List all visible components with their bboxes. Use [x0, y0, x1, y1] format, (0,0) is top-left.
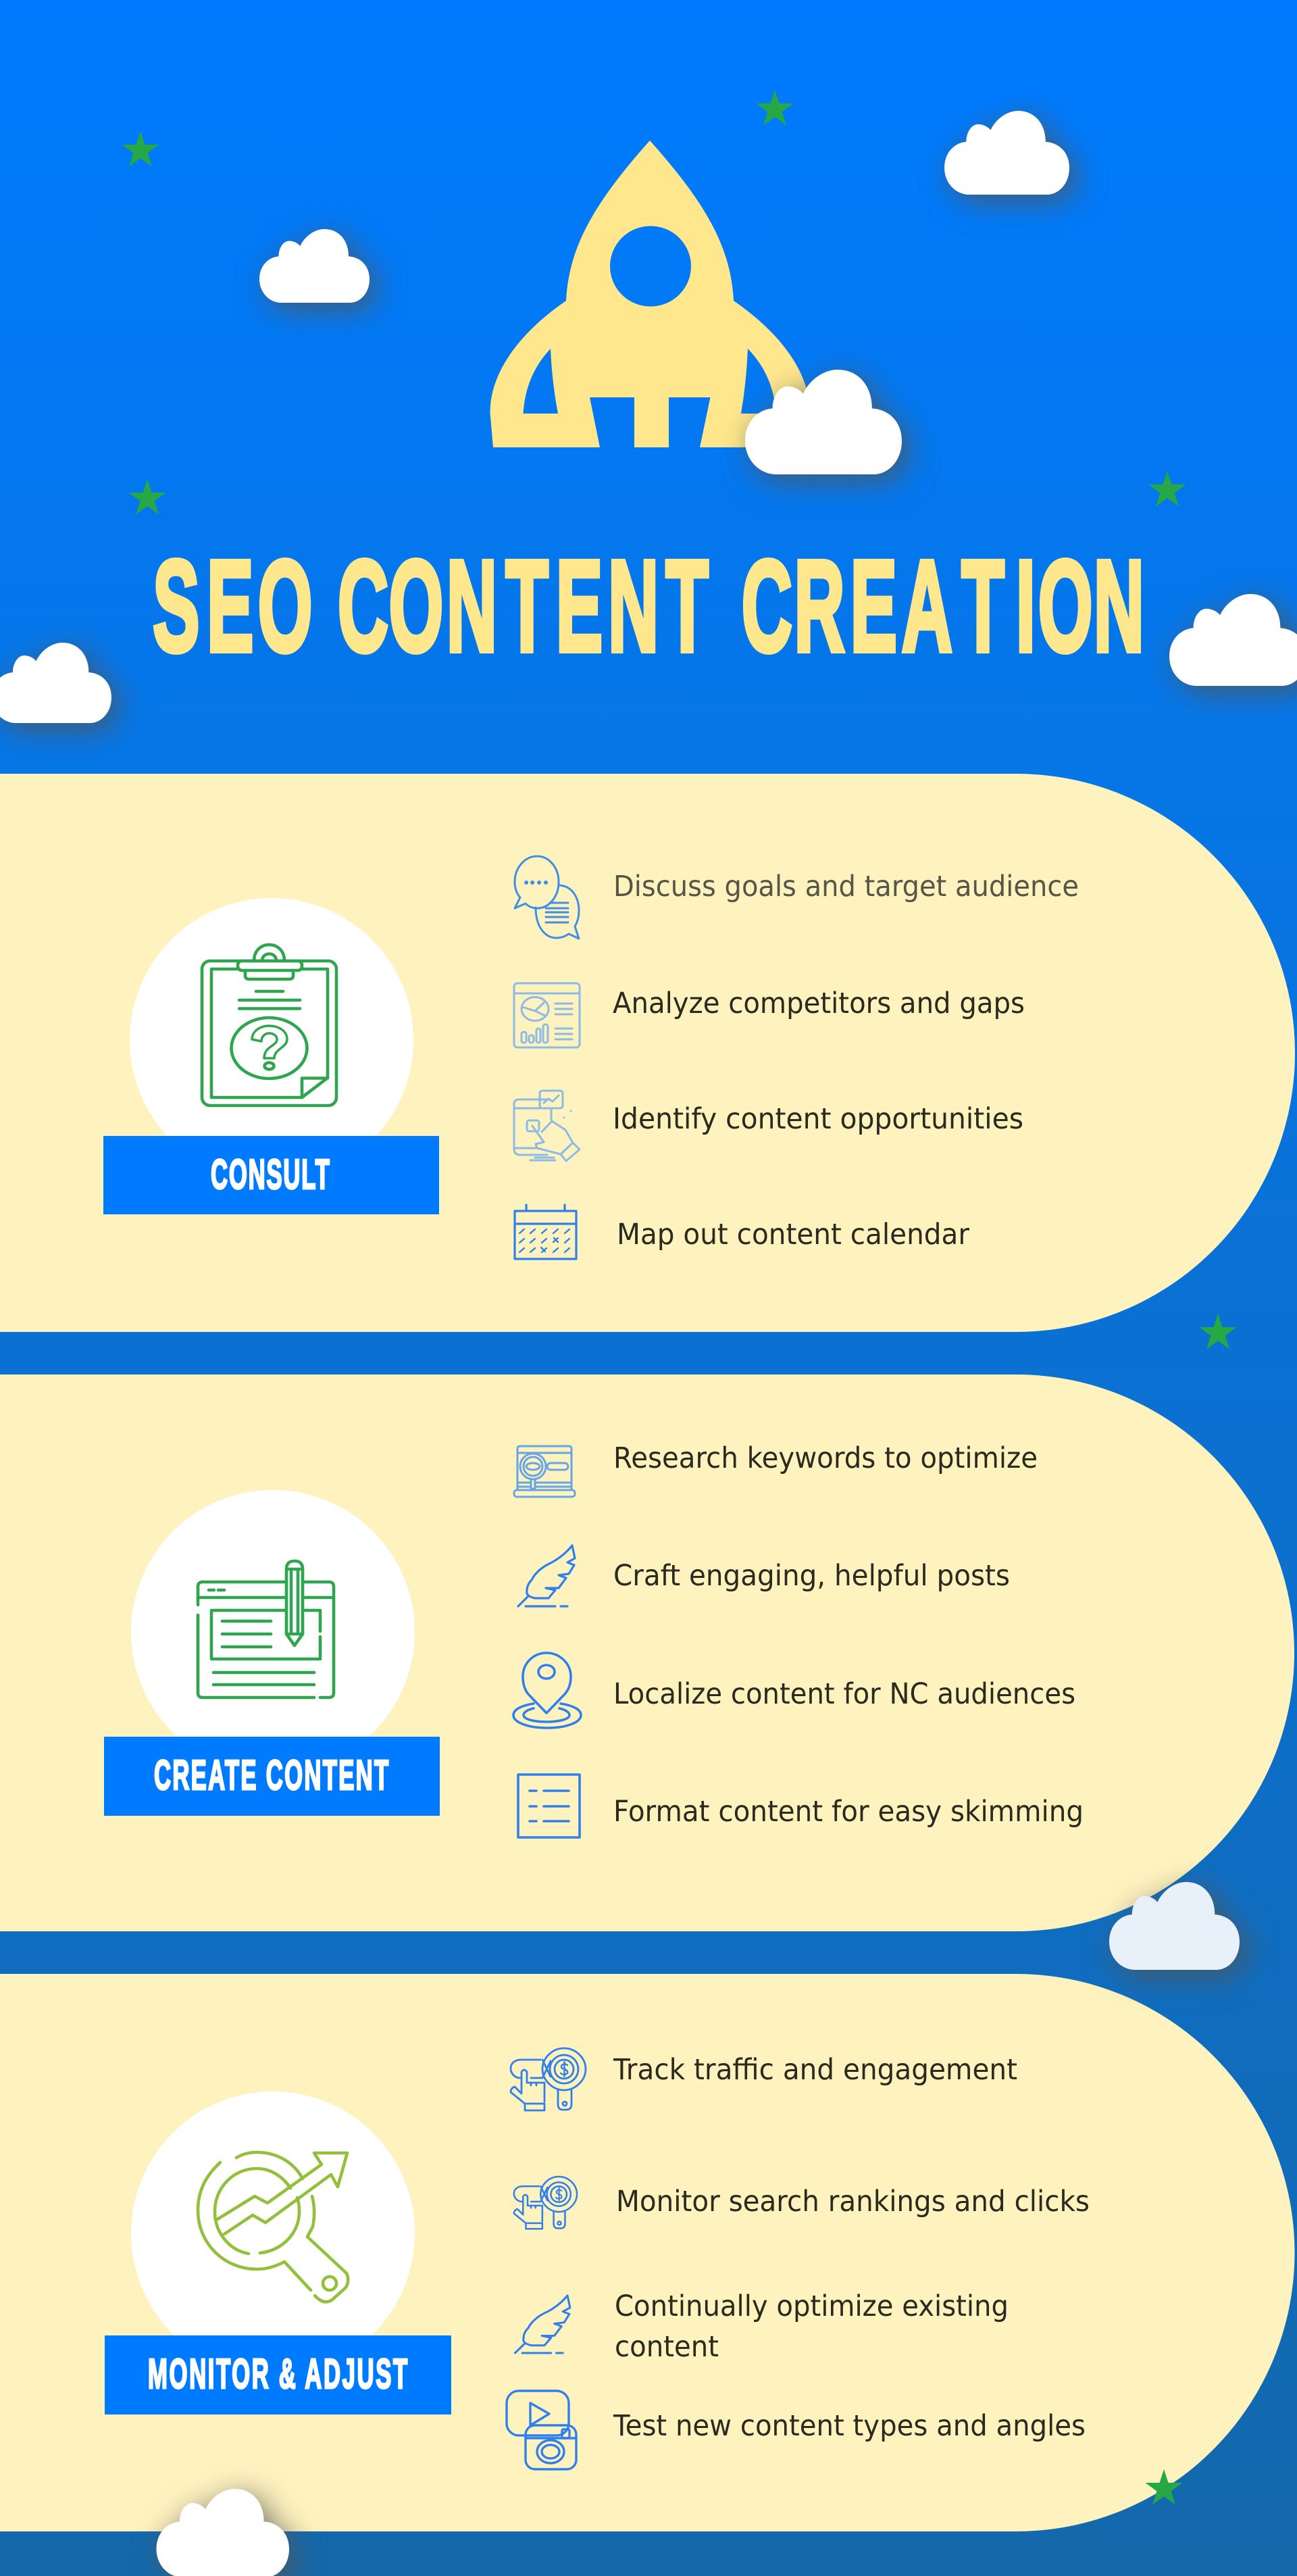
icon: dashboard	[514, 983, 580, 1047]
icon: calendar	[515, 1205, 576, 1259]
consult icon circle	[130, 898, 413, 1182]
icon: hand and dollar lens small	[514, 2177, 577, 2229]
icon: phone and hand	[514, 1091, 580, 1161]
panel: create content	[0, 1374, 1294, 1931]
icon: list document	[518, 1775, 580, 1837]
create content list text: Localize content for NC audiences	[613, 1677, 1075, 1711]
consult list text: Identify content opportunities	[613, 1102, 1023, 1136]
icon: laptop with magnifier	[514, 1446, 575, 1497]
monitor list text: Track traffic and engagement	[613, 2053, 1017, 2087]
star top left	[122, 131, 159, 166]
monitor list text: Test new content types and angles	[613, 2409, 1086, 2443]
create content label	[104, 1737, 440, 1816]
cloud top left	[259, 229, 370, 303]
cloud bottom	[157, 2489, 289, 2576]
icon: window with pencil	[198, 1561, 334, 1698]
consult label	[103, 1136, 439, 1214]
rocket	[490, 141, 810, 447]
icon: feather small	[515, 2296, 570, 2353]
icon: hand and dollar lens	[511, 2048, 586, 2110]
panel: consult	[0, 774, 1295, 1332]
icon: clipboard with question mark	[202, 945, 336, 1106]
icon: feather	[518, 1545, 575, 1606]
cloud over rocket	[745, 370, 902, 474]
monitor label	[105, 2335, 451, 2414]
consult list text: Discuss goals and target audience	[613, 870, 1079, 903]
star top centre	[756, 90, 794, 126]
create content list text: Format content for easy skimming	[613, 1795, 1084, 1829]
create content icon circle	[131, 1490, 415, 1774]
cloud left edge	[0, 643, 111, 723]
panel: monitor and adjust	[0, 1974, 1295, 2531]
consult label: CONSULT	[211, 1151, 330, 1198]
star right	[1148, 471, 1186, 507]
star on bottom panel	[1145, 2469, 1183, 2504]
consult list text: Analyze competitors and gaps	[613, 987, 1025, 1020]
create content list text: Craft engaging, helpful posts	[613, 1559, 1010, 1593]
create content list text	[613, 1441, 1084, 1829]
consult list text: Map out content calendar	[617, 1218, 969, 1252]
monitor list text: content	[615, 2330, 719, 2364]
title: SEO CONTENT CREATION	[153, 533, 1144, 678]
star between panels	[1199, 1314, 1237, 1349]
monitor list text	[613, 2053, 1090, 2443]
icon: video and camera	[507, 2391, 576, 2469]
monitor list text: Monitor search rankings and clicks	[616, 2185, 1090, 2219]
icon: location pin	[513, 1653, 581, 1728]
monitor label: MONITOR & ADJUST	[148, 2350, 407, 2398]
icon: chat bubbles	[515, 856, 579, 939]
icon: magnifier with growth arrow	[198, 2152, 348, 2302]
cloud top right	[944, 111, 1069, 195]
cloud right of title	[1169, 594, 1297, 686]
star left	[128, 479, 166, 515]
consult list text	[613, 870, 1079, 1252]
monitor list text: Continually optimize existing	[615, 2289, 1009, 2323]
cloud between panels	[1109, 1882, 1240, 1970]
create content label: CREATE CONTENT	[154, 1752, 388, 1799]
create content list text: Research keywords to optimize	[613, 1441, 1038, 1475]
monitor icon circle	[131, 2091, 415, 2375]
